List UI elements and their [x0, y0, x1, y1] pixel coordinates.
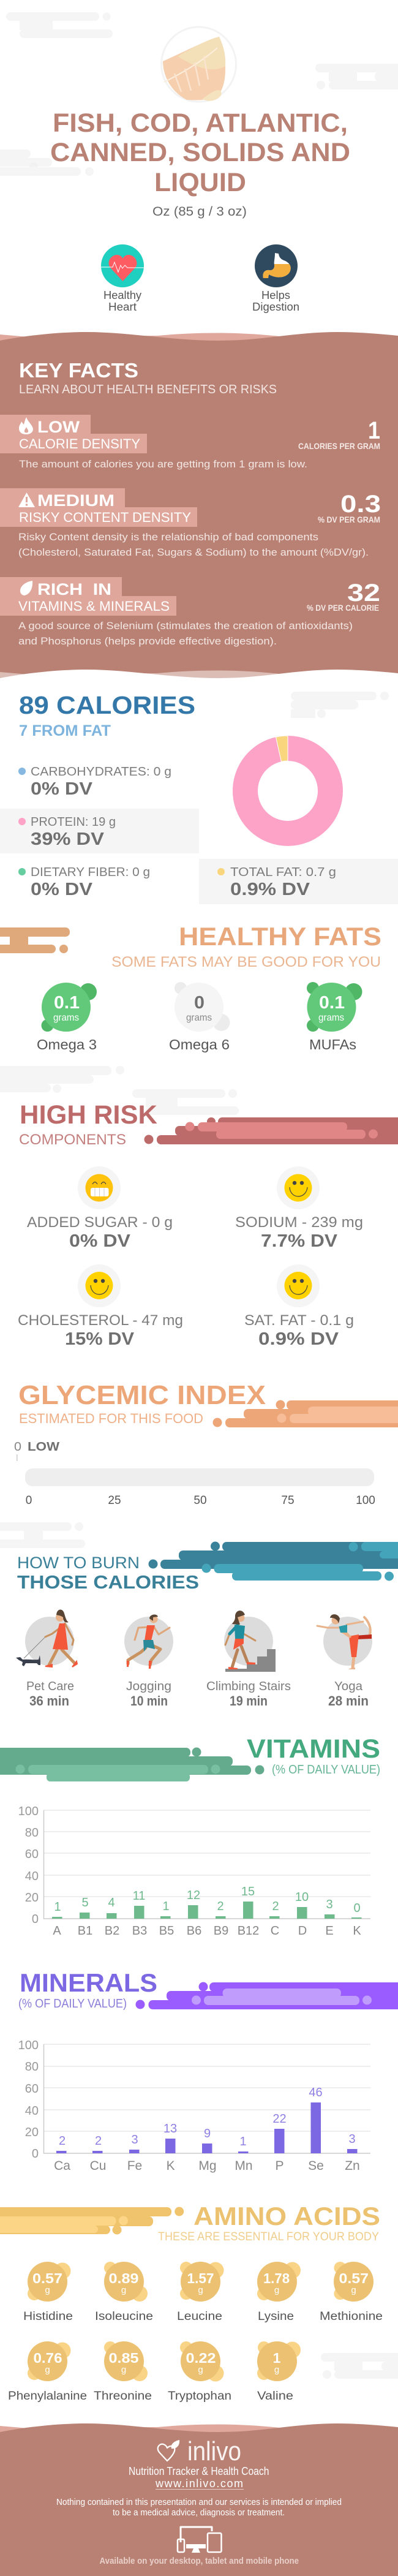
- title: LIQUID: [154, 168, 246, 197]
- bar chart: vitamins: E: [325, 1924, 334, 1938]
- item: saturated fat: [244, 1264, 354, 1349]
- amino: valine: [257, 2341, 301, 2403]
- macro: protein: 39% DV: [31, 829, 105, 849]
- item: added sugar: 0% DV: [69, 1231, 131, 1251]
- fact: medium risky content density: (Cholesterol, Saturated Fat, Sugars & Sodium) to the amount (%DV/gr).: [18, 546, 369, 558]
- amino: lysine: 1.78: [263, 2270, 290, 2286]
- amino: methionine: 0.57: [339, 2270, 369, 2286]
- amino: isoleucine: Isoleucine: [95, 2310, 153, 2323]
- bar chart: vitamins: B6: [187, 1924, 201, 1938]
- amino: tryptophan: 0.22: [186, 2350, 216, 2366]
- title: CANNED, SOLIDS AND: [50, 138, 350, 167]
- bubble: omega 3: [37, 983, 97, 1052]
- bar chart: minerals: 3: [348, 2132, 356, 2146]
- bar chart: vitamins: 40: [25, 1870, 39, 1883]
- fact: rich in vitamins and minerals: 32: [347, 580, 380, 606]
- bar chart: vitamins: B12: [238, 1924, 259, 1938]
- macro: carbohydrates: 0% DV: [31, 779, 93, 799]
- macro: total fat: TOTAL FAT: 0.7 g: [230, 866, 336, 879]
- bubble: mufas: MUFAs: [309, 1037, 356, 1052]
- fact: rich in vitamins and minerals: [0, 577, 380, 647]
- amino: valine: 1: [273, 2350, 281, 2366]
- bar chart: minerals: 80: [25, 2060, 39, 2074]
- tagline: Nutrition Tracker & Health Coach: [129, 2465, 269, 2477]
- fact: rich in vitamins and minerals: A good source of Selenium (stimulates the creation of antioxidants): [18, 620, 353, 632]
- amino: threonine: g: [121, 2365, 126, 2375]
- bubble: mufas: [307, 982, 362, 1052]
- label: jogging: 10 min: [130, 1693, 168, 1709]
- amino: methionine: [320, 2262, 383, 2323]
- heading: amino acids: AMINO ACIDS: [193, 2202, 380, 2230]
- bar chart: minerals: Fe: [127, 2159, 142, 2173]
- disclaimer: [56, 2497, 342, 2518]
- fact: medium risky content density: 0.3: [340, 491, 381, 518]
- bar chart: vitamins: 20: [25, 1891, 39, 1905]
- bubble: mufas: 0.1: [319, 993, 345, 1013]
- bar chart: minerals: 100: [18, 2039, 39, 2052]
- fact: rich in vitamins and minerals: % DV PER CALORIE: [307, 603, 379, 613]
- bar chart: minerals: 40: [25, 2104, 39, 2118]
- subheading: LEARN ABOUT HEALTH BENEFITS OR RISKS: [19, 383, 277, 396]
- bar chart: vitamins: 1: [162, 1900, 170, 1913]
- item: sodium: [235, 1166, 363, 1251]
- bar chart: vitamins: 0: [32, 1913, 39, 1926]
- gauge scale: 75: [281, 1494, 295, 1507]
- bar chart: vitamins: 12: [187, 1889, 200, 1902]
- fact: medium risky content density: % DV PER GRAM: [318, 515, 380, 524]
- amino: tryptophan: [168, 2341, 231, 2403]
- subheading: ESTIMATED FOR THIS FOOD: [19, 1411, 203, 1426]
- disclaimer: to be a medical advice, diagnosis or treatment.: [113, 2507, 285, 2518]
- panel: high risk components: [18, 1100, 398, 1349]
- bar chart: vitamins: D: [298, 1924, 307, 1938]
- activity: climbing stairs: [224, 1611, 276, 1672]
- bar chart: vitamins: 2: [217, 1900, 224, 1913]
- bar chart: vitamins: B1: [78, 1924, 92, 1938]
- bar chart: minerals: 3: [131, 2133, 138, 2147]
- label: climbing stairs: [206, 1680, 291, 1709]
- amino: isoleucine: g: [121, 2285, 126, 2295]
- bar chart: minerals: 46: [309, 2086, 323, 2099]
- bar chart: vitamins: 11: [133, 1889, 145, 1903]
- bar chart: minerals: 60: [25, 2082, 39, 2096]
- heading: calories: 89 CALORIES: [19, 691, 195, 719]
- heading: how to burn those calories: THOSE CALORIES: [17, 1571, 199, 1593]
- bar chart: minerals: Cu: [90, 2159, 106, 2173]
- amino: phenylalanine: g: [45, 2365, 50, 2375]
- label: helps digestion: Digestion: [252, 301, 299, 313]
- amino: threonine: [94, 2341, 152, 2403]
- bar chart: minerals: 2: [95, 2134, 102, 2148]
- gauge value: [14, 1440, 59, 1461]
- gauge scale: 50: [193, 1494, 207, 1507]
- amino: leucine: [177, 2262, 224, 2323]
- macro: protein: PROTEIN: 19 g: [31, 815, 116, 829]
- bubble: omega 3: Omega 3: [37, 1037, 97, 1052]
- label: yoga: [328, 1680, 369, 1709]
- fact: low calorie density: The amount of calories you are getting from 1 gram is low.: [19, 458, 307, 470]
- bar chart: vitamins: B3: [132, 1924, 147, 1938]
- bar chart: minerals: 22: [272, 2112, 287, 2126]
- amino: valine: g: [274, 2365, 279, 2375]
- heading: vitamins: VITAMINS: [247, 1734, 380, 1764]
- panel: minerals: [18, 1968, 398, 2173]
- gauge scale: 0: [26, 1494, 32, 1507]
- fact: rich in vitamins and minerals: VITAMINS & MINERALS: [18, 599, 170, 614]
- item: cholesterol: [18, 1264, 183, 1349]
- bar chart: minerals: 2: [59, 2134, 66, 2148]
- bar chart: vitamins: 1: [54, 1900, 61, 1914]
- label: helps digestion: [252, 289, 299, 313]
- macro: carbohydrates: CARBOHYDRATES: 0 g: [31, 765, 171, 779]
- website link: www.inlivo.com: [155, 2477, 243, 2490]
- food photo: cod fillet in a circle: [162, 27, 236, 102]
- label: healthy heart: Healthy: [103, 289, 141, 301]
- bar chart: vitamins: 4: [108, 1896, 115, 1909]
- bar chart: vitamins: 2: [272, 1900, 279, 1913]
- amino: methionine: g: [351, 2285, 356, 2295]
- amino: lysine: g: [274, 2285, 279, 2295]
- bar chart: minerals: Ca: [54, 2159, 70, 2173]
- gauge track: [25, 1468, 374, 1486]
- bar chart: minerals: Mg: [198, 2159, 217, 2173]
- logo: inlivo: [158, 2436, 241, 2466]
- title: FISH, COD, ATLANTIC,: [53, 108, 348, 138]
- label: yoga: Yoga: [334, 1680, 363, 1693]
- footer: [0, 2423, 398, 2576]
- availability note: Available on your desktop, tablet and mobile phone: [99, 2556, 299, 2566]
- amino: isoleucine: 0.89: [109, 2270, 138, 2286]
- subheading: COMPONENTS: [19, 1131, 126, 1148]
- icon: desktop, tablet and phone: [178, 2527, 222, 2553]
- gauge scale: [26, 1494, 375, 1507]
- bar chart: minerals: 1: [239, 2135, 247, 2148]
- fact: low calorie density: 1: [368, 417, 380, 444]
- bar chart: vitamins: 3: [326, 1898, 333, 1911]
- donut chart: [245, 736, 331, 833]
- item: cholesterol: 15% DV: [65, 1329, 135, 1349]
- item: saturated fat: SAT. FAT - 0.1 g: [244, 1312, 354, 1329]
- label: helps digestion: Helps: [261, 289, 290, 301]
- heading: how to burn those calories: HOW TO BURN: [17, 1554, 140, 1572]
- label: healthy heart: Heart: [108, 301, 137, 313]
- heading: glycemic index: GLYCEMIC INDEX: [18, 1380, 266, 1410]
- title: [50, 108, 350, 197]
- bar chart: minerals: Zn: [345, 2159, 360, 2173]
- bar chart: vitamins: [18, 1805, 370, 1938]
- heading: healthy fats: HEALTHY FATS: [179, 922, 381, 951]
- activity: pet care: [16, 1609, 77, 1667]
- label: climbing stairs: 19 min: [230, 1693, 268, 1709]
- bar chart: minerals: 9: [204, 2127, 211, 2140]
- label: pet care: 36 min: [29, 1693, 69, 1709]
- header: food title and benefits: [50, 27, 350, 313]
- amino: leucine: Leucine: [177, 2310, 222, 2323]
- label: pet care: [26, 1680, 74, 1709]
- icon: warning triangle: [18, 493, 35, 507]
- icon: leaf: [20, 581, 32, 595]
- bar chart: vitamins: A: [53, 1924, 61, 1938]
- gauge scale: 25: [108, 1494, 121, 1507]
- bar chart: minerals: 13: [163, 2122, 177, 2136]
- amino: isoleucine: [95, 2262, 153, 2323]
- icon: flame: [19, 417, 33, 434]
- label: jogging: [126, 1680, 171, 1709]
- heading: high risk: HIGH RISK: [20, 1100, 157, 1130]
- item: sodium: 7.7% DV: [261, 1231, 338, 1251]
- panel: key facts: [0, 332, 398, 689]
- bar chart: vitamins: K: [353, 1924, 361, 1938]
- bar chart: minerals: 20: [25, 2126, 39, 2139]
- bar chart: vitamins: 100: [18, 1805, 39, 1818]
- amino: threonine: Threonine: [94, 2390, 152, 2403]
- panel: amino acids: [0, 2202, 383, 2403]
- label: healthy heart: [103, 289, 141, 313]
- amino: histidine: 0.57: [32, 2270, 62, 2286]
- amino: threonine: 0.85: [109, 2350, 139, 2366]
- heading: minerals: MINERALS: [20, 1968, 157, 1997]
- amino: lysine: [257, 2262, 301, 2323]
- panel: healthy fats: [0, 922, 381, 1052]
- amino: phenylalanine: 0.76: [33, 2350, 62, 2366]
- amino: phenylalanine: [8, 2341, 87, 2403]
- fact: low calorie density: CALORIES PER GRAM: [298, 441, 380, 451]
- bar chart: vitamins: B5: [159, 1924, 174, 1938]
- bar chart: minerals: K: [167, 2159, 175, 2173]
- fact: low calorie density: [0, 415, 380, 470]
- disclaimer: Nothing contained in this presentation and our services is intended or implied: [56, 2497, 342, 2507]
- subheading: (% OF DAILY VALUE): [18, 1997, 127, 2011]
- icon: helps digestion: [255, 244, 298, 287]
- bubble: omega 3: grams: [53, 1013, 79, 1023]
- fact: low calorie density: LOW: [37, 418, 80, 436]
- subheading: (% OF DAILY VALUE): [272, 1763, 380, 1777]
- icon: healthy heart: [101, 244, 144, 287]
- bar chart: vitamins: B2: [105, 1924, 119, 1938]
- amino: leucine: 1.57: [187, 2270, 214, 2286]
- label: pet care: Pet Care: [26, 1680, 74, 1693]
- amino: histidine: Histidine: [23, 2310, 73, 2323]
- item: cholesterol: CHOLESTEROL - 47 mg: [18, 1312, 183, 1329]
- heading: how to burn those calories: [17, 1554, 199, 1593]
- bubble: omega 6: [169, 982, 230, 1052]
- amino: methionine: Methionine: [320, 2310, 383, 2323]
- amino: histidine: [23, 2262, 73, 2323]
- panel: how to burn those calories: [16, 1541, 398, 1709]
- fact: medium risky content density: RISKY CONTENT DENSITY: [19, 510, 191, 525]
- macro: dietary fiber: [18, 866, 150, 899]
- bar chart: minerals: Se: [308, 2159, 324, 2173]
- panel: glycemic index: [14, 1380, 398, 1507]
- amino: lysine: Lysine: [258, 2310, 294, 2323]
- bubble: mufas: grams: [318, 1013, 344, 1023]
- fact: low calorie density: CALORIE DENSITY: [19, 436, 140, 451]
- item: added sugar: [27, 1166, 173, 1251]
- label: climbing stairs: Climbing Stairs: [206, 1680, 291, 1693]
- gauge value: LOW: [28, 1440, 59, 1454]
- label: jogging: Jogging: [126, 1680, 171, 1693]
- bubble: omega 6: Omega 6: [169, 1037, 230, 1052]
- heading: key facts: KEY FACTS: [19, 359, 138, 382]
- bar chart: vitamins: 0: [353, 1902, 361, 1915]
- bubble: omega 3: 0.1: [54, 993, 80, 1013]
- fact: rich in vitamins and minerals: and Phosphorus (helps provide effective digestion).: [18, 635, 277, 647]
- amino: phenylalanine: Phenylalanine: [8, 2390, 87, 2403]
- amino: leucine: g: [198, 2285, 203, 2295]
- fact: medium risky content density: Risky Content density is the relationship of bad components: [18, 531, 318, 543]
- bubble: omega 6: 0: [194, 993, 205, 1013]
- bar chart: vitamins: 80: [25, 1826, 39, 1840]
- amino: tryptophan: Tryptophan: [168, 2390, 231, 2403]
- panel: calories and macronutrients: [0, 691, 398, 904]
- bar chart: vitamins: 5: [81, 1896, 89, 1909]
- label: yoga: 28 min: [328, 1693, 369, 1709]
- bar chart: minerals: 0: [32, 2147, 39, 2161]
- serving size: Oz (85 g / 3 oz): [152, 205, 247, 219]
- bar chart: vitamins: 60: [25, 1848, 39, 1861]
- bar chart: vitamins: B9: [214, 1924, 228, 1938]
- panel: vitamins: [0, 1734, 380, 1938]
- fact: medium risky content density: [0, 488, 381, 558]
- subheading: THESE ARE ESSENTIAL FOR YOUR BODY: [158, 2230, 379, 2243]
- item: added sugar: ADDED SUGAR - 0 g: [27, 1214, 173, 1231]
- macro: dietary fiber: DIETARY FIBER: 0 g: [31, 866, 150, 879]
- activity: yoga: [317, 1614, 372, 1669]
- macro: total fat: [199, 859, 398, 904]
- subheading: from fat: 7 FROM FAT: [19, 722, 111, 739]
- bar chart: minerals: Mn: [235, 2159, 253, 2173]
- bar chart: vitamins: 15: [241, 1885, 255, 1898]
- macro: total fat: 0.9% DV: [230, 880, 310, 899]
- bar chart: vitamins: C: [271, 1924, 279, 1938]
- amino: valine: Valine: [257, 2390, 293, 2403]
- macro: protein: [0, 809, 199, 853]
- bubble: omega 6: grams: [186, 1013, 212, 1023]
- amino: tryptophan: g: [198, 2365, 203, 2375]
- macro: carbohydrates: [18, 765, 171, 799]
- gauge scale: 100: [356, 1494, 375, 1507]
- subheading: SOME FATS MAY BE GOOD FOR YOU: [111, 954, 381, 970]
- item: sodium: SODIUM - 239 mg: [235, 1214, 363, 1231]
- activity: jogging: [124, 1614, 173, 1669]
- fact: rich in vitamins and minerals: RICH IN: [37, 580, 111, 599]
- fact: medium risky content density: MEDIUM: [37, 491, 115, 510]
- macro: dietary fiber: 0% DV: [31, 880, 93, 899]
- logo: inlivo: inlivo: [187, 2436, 241, 2466]
- item: saturated fat: 0.9% DV: [258, 1329, 339, 1349]
- bar chart: minerals: P: [275, 2159, 284, 2173]
- bar chart: minerals: [18, 2039, 370, 2173]
- gauge value: 0: [14, 1440, 21, 1454]
- bar chart: vitamins: 10: [295, 1890, 309, 1904]
- amino: histidine: g: [45, 2285, 50, 2295]
